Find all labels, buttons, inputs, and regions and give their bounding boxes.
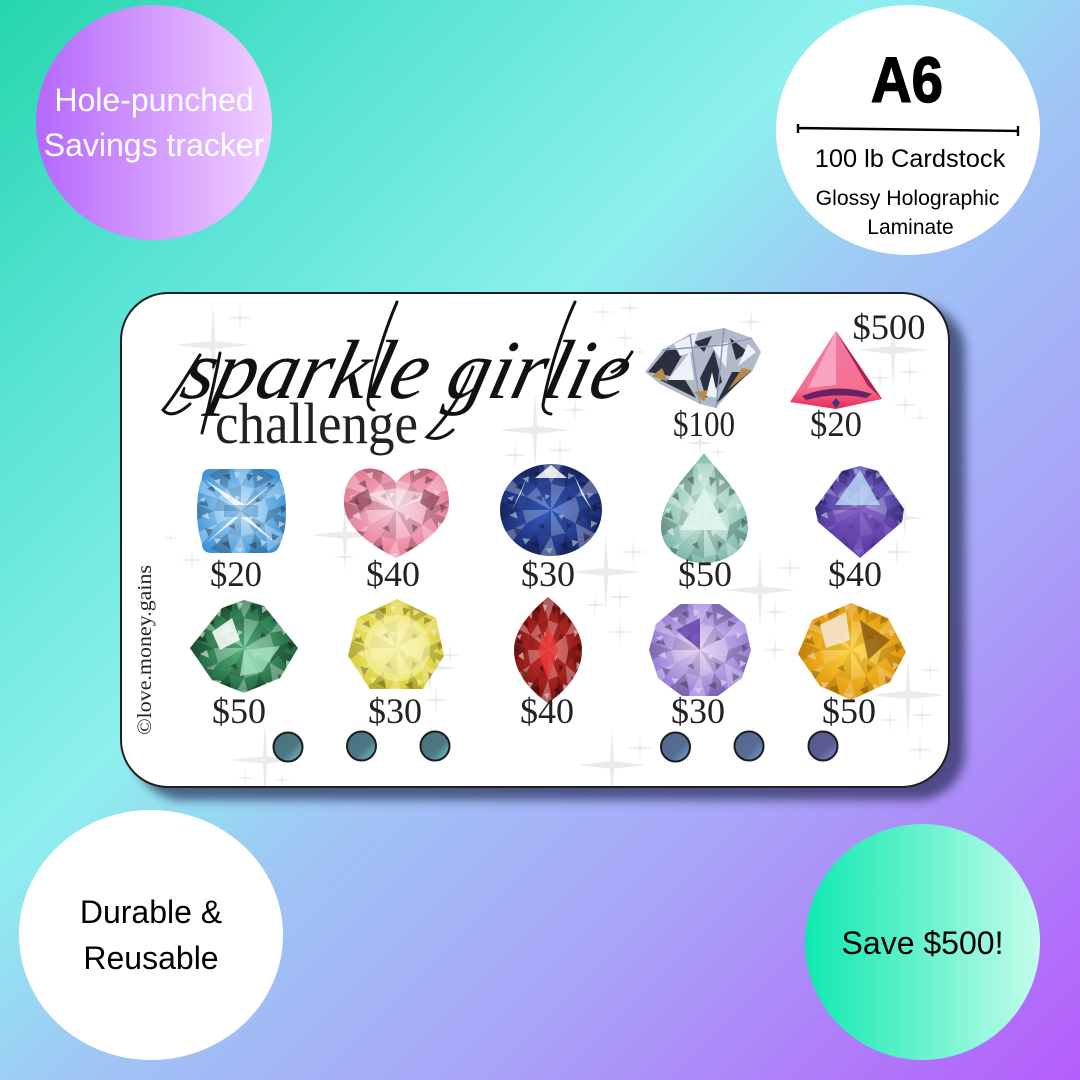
price labels: $50	[822, 691, 876, 731]
price labels: $20	[810, 404, 862, 444]
callout: hole-punched savings tracker	[36, 5, 272, 240]
punch holes	[274, 732, 838, 762]
panel: savings tracker card	[120, 292, 950, 788]
price labels: $40	[520, 691, 574, 731]
price labels: $40	[828, 554, 882, 594]
price labels: $30	[671, 691, 725, 731]
title: sparkle girlie	[163, 302, 641, 438]
callout: A6 size and materials	[776, 5, 1040, 255]
gem: yellow heptagon	[348, 599, 444, 689]
gem: purple cushion	[815, 466, 904, 558]
title: challenge: challenge	[215, 391, 418, 456]
price labels: $500	[852, 307, 926, 347]
callout: durable and reusable: Durable &	[80, 894, 222, 930]
title: sparkle girlie: sparkle girlie	[173, 324, 641, 417]
price labels	[210, 307, 926, 731]
price labels: $100	[673, 404, 735, 444]
price labels: $20	[210, 554, 262, 594]
price labels: $50	[212, 691, 266, 731]
gem: mint pear	[661, 453, 748, 563]
gem: diamond $100	[645, 328, 761, 408]
gem: pink heart	[344, 468, 449, 558]
price labels: $30	[368, 691, 422, 731]
gem: amber cushion	[798, 603, 906, 700]
callout: durable and reusable: Reusable	[83, 940, 219, 976]
gem: pink triangle $20	[790, 331, 882, 409]
callout: save $500: Save $500!	[842, 925, 1003, 961]
callout: A6 size and materials: 100 lb Cardstock	[815, 145, 1005, 173]
gem: lavender round	[649, 604, 751, 696]
callout: durable and reusable	[19, 810, 283, 1060]
gem: red marquise	[514, 597, 582, 703]
gem: green cushion	[190, 600, 298, 693]
credit: love.money.gains: ©love.money.gains	[134, 565, 156, 735]
callout: A6 size and materials: Laminate	[867, 216, 954, 239]
gem: blue cushion	[197, 469, 286, 553]
price labels: $30	[521, 554, 575, 594]
callout: A6 size and materials: Glossy Holographic	[816, 187, 999, 210]
price labels: $40	[366, 554, 420, 594]
callout: save $500	[805, 824, 1040, 1060]
price labels: $50	[678, 554, 732, 594]
callout: hole-punched savings tracker: Savings tracker	[44, 127, 264, 163]
callout: A6 size and materials: A6	[871, 44, 943, 116]
callout: hole-punched savings tracker: Hole-punched	[54, 82, 254, 118]
gem: navy round	[500, 464, 602, 556]
